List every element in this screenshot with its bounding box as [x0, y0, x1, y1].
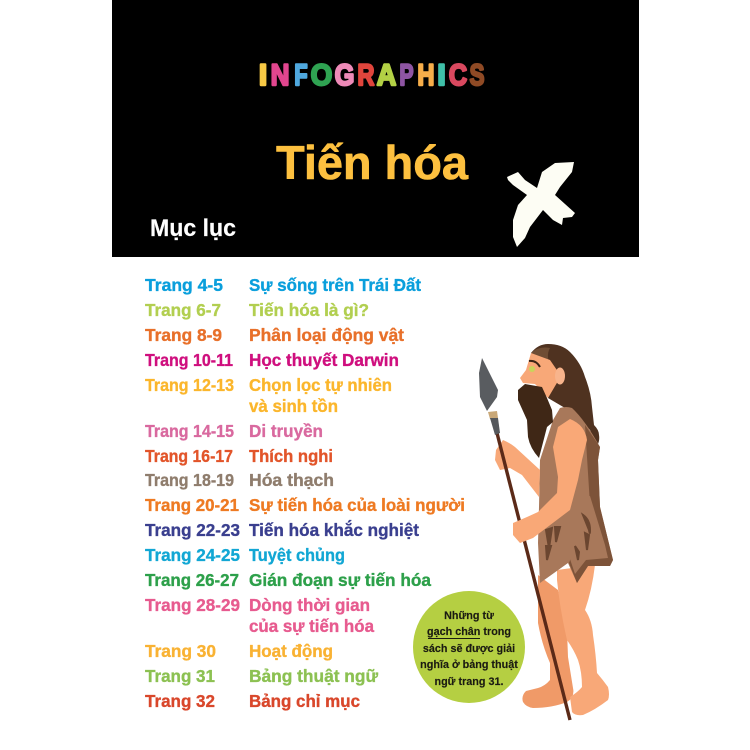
tunic lower panel [540, 496, 608, 574]
entry: Trang 16-17: Trang 16-17 [145, 446, 233, 466]
entry: Trang 14-15: Di truyền [249, 421, 323, 441]
brow [529, 361, 540, 367]
entry: Trang 18-19 [145, 470, 334, 490]
entry: Trang 22-23 [145, 519, 419, 540]
spear neck [490, 418, 500, 435]
entry: Trang 28-29: Trang 28-29 [145, 595, 240, 615]
entry: Trang 31: Trang 31 [145, 666, 215, 686]
entry: Trang 28-29: Dòng thời gian [249, 595, 370, 615]
series title: INFOGRAPHICS: R [358, 58, 374, 92]
series title: INFOGRAPHICS: S [470, 58, 484, 92]
callout: glossary note: sách sẽ được giải [423, 643, 515, 655]
entry: Trang 22-23: Trang 22-23 [145, 520, 240, 540]
entry: Trang 4-5 [145, 275, 421, 295]
entry: Trang 12-13 [145, 375, 392, 416]
entry: Trang 10-11: Trang 10-11 [145, 350, 233, 370]
entry: Trang 30 [145, 641, 333, 661]
front leg [557, 565, 609, 715]
entry: Trang 8-9 [145, 325, 404, 345]
spear binding [488, 411, 498, 419]
callout: glossary note: ngữ trang 31. [434, 676, 504, 688]
entry: Trang 6-7: Tiến hóa là gì? [249, 300, 369, 320]
eye [529, 366, 535, 372]
entry: Trang 28-29 [145, 595, 374, 636]
entry: Trang 14-15 [145, 421, 323, 441]
entry: Trang 16-17: Thích nghi [249, 446, 333, 466]
entry: Trang 32: Trang 32 [145, 691, 215, 711]
entry: Trang 18-19: Hóa thạch [249, 470, 334, 490]
entry: Trang 20-21: Trang 20-21 [145, 495, 239, 515]
entry: Trang 22-23: Tiến hóa khắc nghiệt [249, 519, 419, 540]
callout: glossary note: gạch chân trong [427, 626, 511, 638]
ear [555, 368, 565, 384]
entry: Trang 20-21: Sự tiến hóa của loài người [249, 495, 465, 515]
entry: Trang 26-27: Trang 26-27 [145, 570, 239, 590]
entry: Trang 28-29: của sự tiến hóa [249, 616, 374, 636]
entry: Trang 18-19: Trang 18-19 [145, 470, 234, 490]
entry: Trang 4-5: Trang 4-5 [145, 275, 223, 295]
entry: Trang 14-15: Trang 14-15 [145, 421, 234, 441]
series title: INFOGRAPHICS: H [418, 58, 434, 92]
entry: Trang 8-9: Trang 8-9 [145, 325, 222, 345]
series title: INFOGRAPHICS: A [377, 59, 396, 92]
series title: INFOGRAPHICS [259, 57, 484, 92]
entry: Trang 12-13: và sinh tồn [249, 396, 338, 416]
face [520, 353, 561, 398]
panel: black header [112, 0, 639, 257]
near arm and hand [513, 419, 587, 543]
illustration: caveman with spear [479, 344, 613, 720]
entry: Trang 10-11 [145, 350, 399, 370]
entry: Trang 10-11: Học thuyết Darwin [249, 350, 399, 370]
entry: Trang 6-7: Trang 6-7 [145, 300, 221, 320]
series title: INFOGRAPHICS: I [259, 59, 267, 92]
table of contents [145, 275, 465, 711]
entry: Trang 12-13: Chọn lọc tự nhiên [249, 375, 392, 395]
entry: Trang 8-9: Phân loại động vật [249, 325, 404, 345]
callout: glossary note: Những từ [444, 610, 494, 622]
spear head [479, 358, 498, 411]
icon: white bird silhouette [507, 162, 575, 247]
entry: Trang 31 [145, 666, 378, 686]
beard [518, 384, 553, 458]
heading: Mục lục: Mục lục [150, 215, 236, 242]
entry: Trang 12-13: Trang 12-13 [145, 375, 234, 395]
back leg [522, 575, 573, 708]
series title: INFOGRAPHICS: F [294, 57, 308, 92]
entry: Trang 4-5: Sự sống trên Trái Đất [249, 275, 421, 295]
callout: glossary note [413, 591, 525, 703]
entry: Trang 16-17 [145, 446, 333, 466]
series title: INFOGRAPHICS: G [335, 58, 354, 91]
tunic [538, 407, 613, 583]
entry: Trang 32 [145, 691, 360, 711]
tunic spots [546, 515, 590, 560]
series title: INFOGRAPHICS: N [271, 58, 289, 91]
entry: Trang 31: Bảng thuật ngữ [249, 666, 378, 686]
entry: Trang 6-7 [145, 300, 369, 320]
spear shaft [497, 433, 570, 720]
series title: INFOGRAPHICS: C [449, 58, 467, 91]
entry: Trang 24-25 [145, 545, 345, 565]
series title: INFOGRAPHICS: P [399, 60, 414, 92]
series title: INFOGRAPHICS: I [437, 59, 446, 92]
hair highlight [531, 348, 552, 370]
title: Tiến hóa: Tiến hóa [276, 136, 469, 189]
entry: Trang 30: Hoạt động [249, 641, 333, 661]
hair [531, 344, 599, 446]
far arm and hand [495, 440, 540, 497]
series title: INFOGRAPHICS: O [311, 59, 332, 92]
entry: Trang 24-25: Tuyệt chủng [249, 545, 345, 565]
entry: Trang 20-21 [145, 495, 465, 515]
callout: glossary note: nghĩa ở bảng thuật [420, 659, 518, 671]
tunic shadow [569, 425, 613, 583]
entry: Trang 32: Bảng chỉ mục [249, 691, 360, 711]
entry: Trang 24-25: Trang 24-25 [145, 545, 240, 565]
entry: Trang 30: Trang 30 [145, 641, 216, 661]
entry: Trang 26-27 [145, 570, 431, 590]
entry: Trang 26-27: Gián đoạn sự tiến hóa [249, 570, 431, 590]
